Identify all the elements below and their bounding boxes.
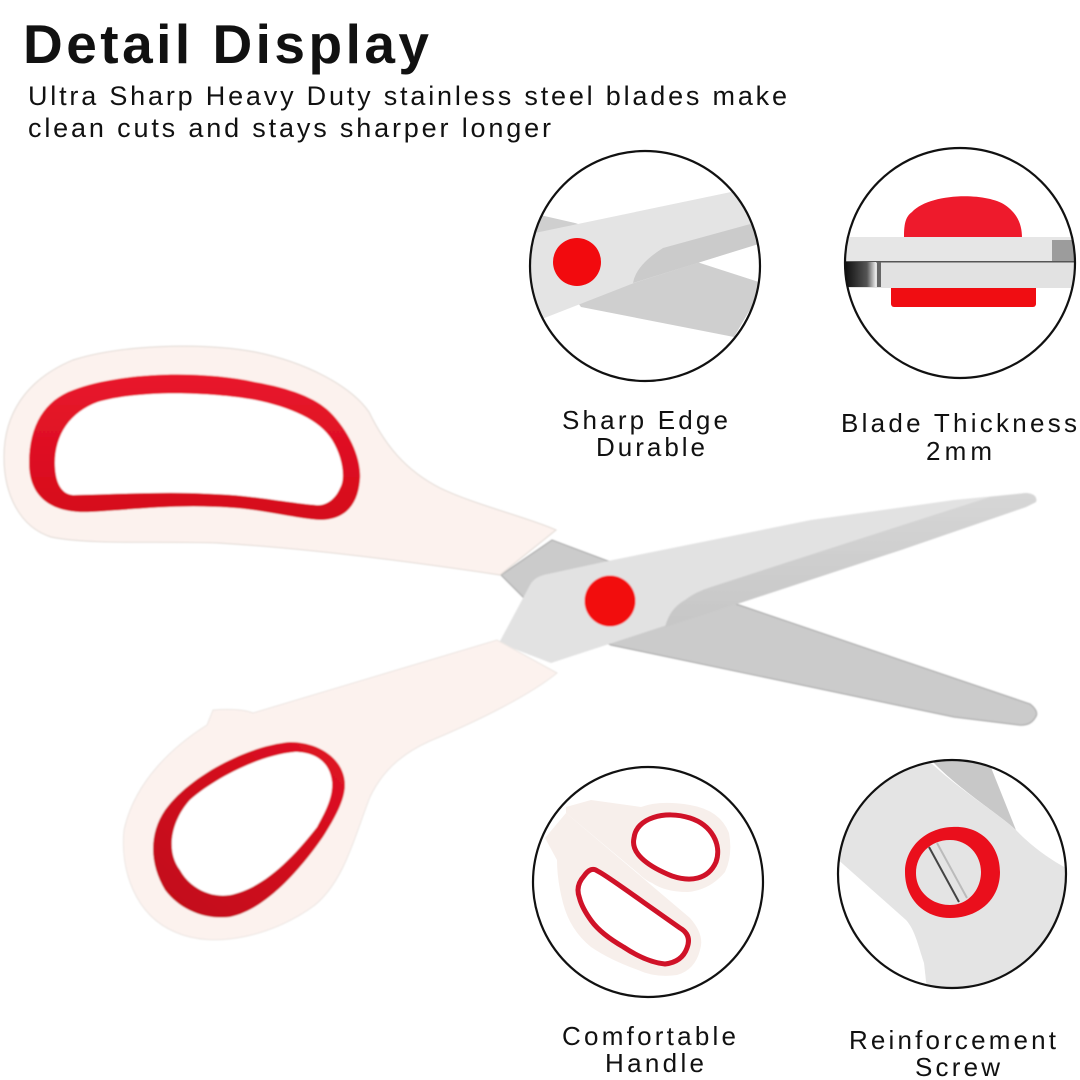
bottom handle (123, 640, 557, 940)
label: sharp edge durable (562, 405, 728, 462)
main scissors (4, 346, 1037, 940)
label: reinforcement screw: Reinforcement (849, 1025, 1057, 1055)
top handle (4, 346, 556, 575)
label: comfortable handle: Handle (605, 1048, 704, 1078)
top handle red grip (29, 374, 360, 520)
detail circle: comfortable handle (533, 767, 763, 997)
label: blade thickness 2mm: Blade Thickness (841, 408, 1077, 438)
label: sharp edge durable: Sharp Edge (562, 405, 728, 435)
detail circle: sharp edge (525, 151, 770, 381)
label: comfortable handle: Comfortable (562, 1021, 736, 1051)
lower blade (501, 540, 1037, 725)
detail circle: reinforcement screw (835, 750, 1070, 990)
upper blade (499, 493, 1036, 663)
label: blade thickness 2mm (841, 408, 1077, 466)
bottom handle red grip (153, 742, 345, 918)
label: comfortable handle (562, 1021, 736, 1078)
subtitle: Ultra Sharp Heavy Duty stainless steel blades make (28, 81, 787, 111)
subtitle (28, 81, 787, 143)
label: sharp edge durable: Durable (596, 432, 705, 462)
detail circle: blade thickness (840, 148, 1080, 378)
label: blade thickness 2mm: 2mm (926, 436, 992, 466)
title: Detail Display (23, 13, 429, 75)
label: reinforcement screw (849, 1025, 1057, 1080)
pivot screw (584, 576, 636, 626)
subtitle: clean cuts and stays sharper longer (28, 113, 551, 143)
